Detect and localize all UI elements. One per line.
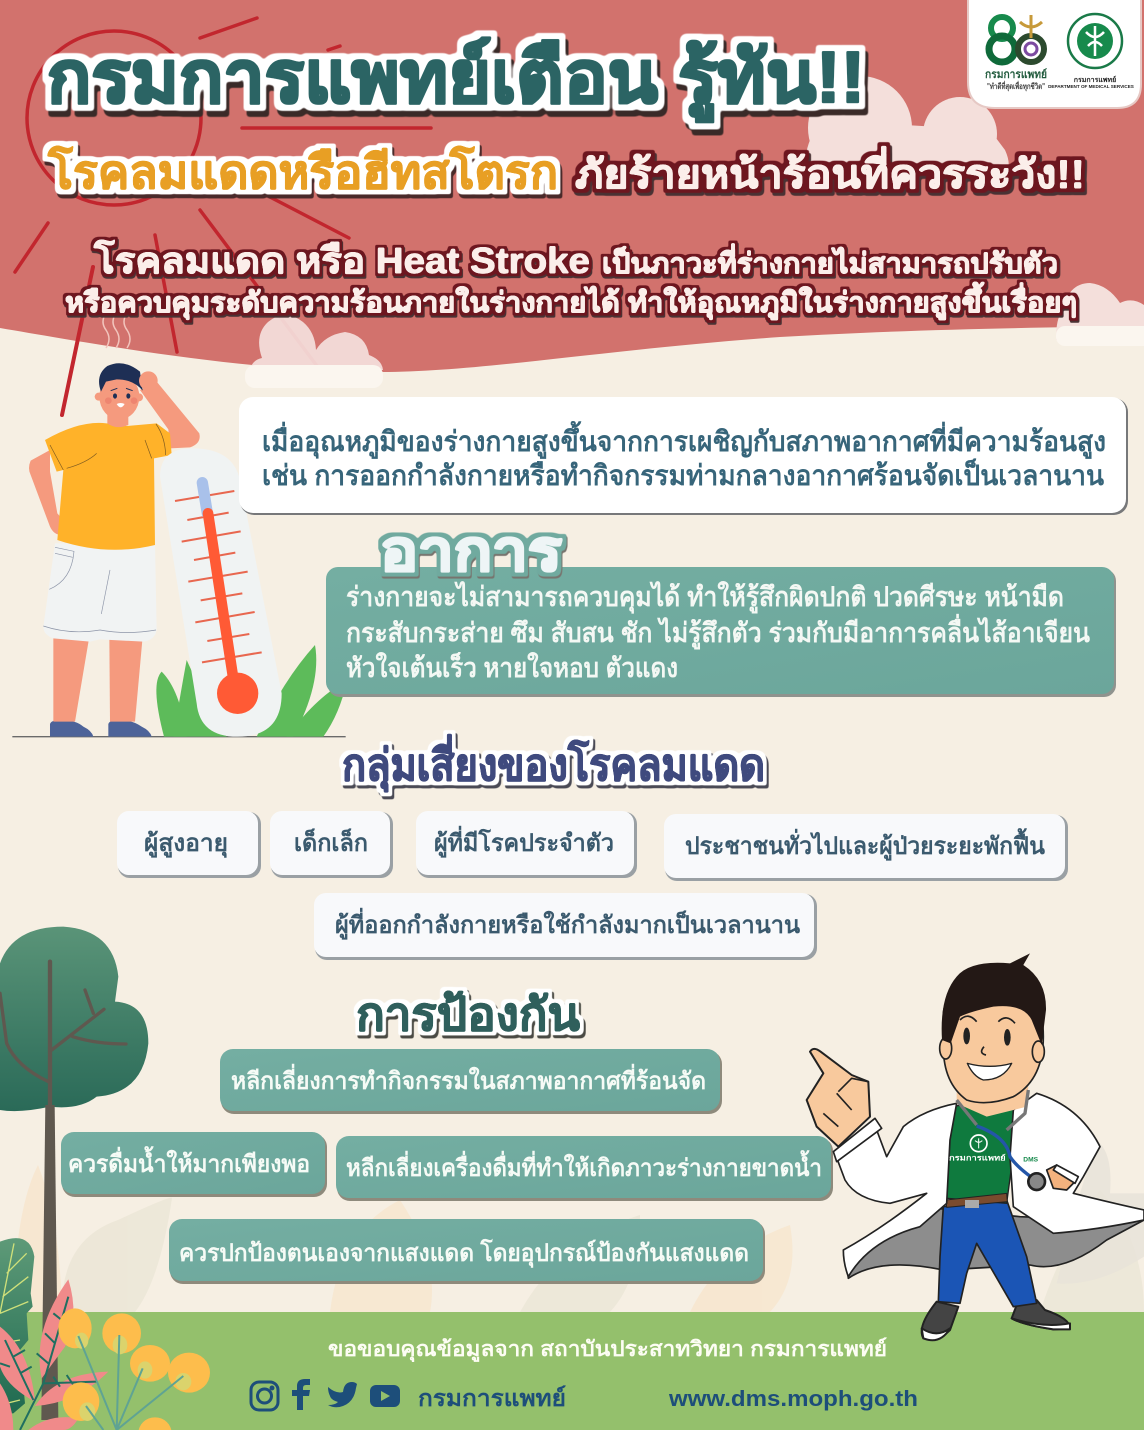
head (95, 363, 143, 419)
prevention heading: การป้องกัน (356, 988, 581, 1040)
soft shadow (1057, 1140, 1144, 1284)
pill: avoid outdoor activity: หลีกเลี่ยงการทำกิจกรรมในสภาพอากาศที่ร้อนจัด (231, 1063, 706, 1095)
risk group pills (117, 811, 1068, 960)
pill: drink water (61, 1132, 327, 1197)
symptoms panel: กระสับกระส่าย ซึม สับสน ชัก ไม่รู้สึกตัว ร่วมกับมีอาการคลื่นไส้อาเจียน (346, 613, 1090, 650)
stethoscope (957, 1090, 1045, 1190)
footer website: www.dms.moph.go.th (668, 1386, 918, 1411)
pill: children: เด็กเล็ก (294, 828, 368, 857)
pill: elderly (117, 811, 261, 878)
icon: 80 years logo (989, 15, 1044, 62)
shorts (43, 543, 157, 642)
shoes (50, 720, 152, 737)
intro paragraph: เป็นภาวะที่ร่างกายไม่สามารถปรับตัว (602, 243, 1058, 279)
icon: youtube (370, 1385, 400, 1407)
clouds (245, 76, 1144, 388)
footer credit: ขอขอบคุณข้อมูลจาก สถาบันประสาทวิทยา กรมการแพทย์ (328, 1337, 887, 1363)
illustration: man with thermometer (12, 363, 347, 737)
pill: avoid outdoor activity (220, 1049, 722, 1114)
pill: children (270, 811, 393, 878)
leaf veins (0, 1297, 97, 1430)
prevention pills (61, 1049, 833, 1284)
shirt (947, 1097, 1027, 1203)
pointing hand (807, 1049, 870, 1147)
pink leaves (0, 1279, 108, 1430)
coat underside (847, 1207, 1144, 1278)
head (943, 977, 1043, 1103)
orange flowers (58, 1308, 210, 1430)
pill: avoid dehydrating drinks: หลีกเลี่ยงเครื่องดื่มที่ทำให้เกิดภาวะร่างกายขาดน้ำ (346, 1149, 822, 1182)
pill: general public: ประชาชนทั่วไปและผู้ป่วยระยะพักฟื้น (685, 827, 1046, 861)
neck (107, 412, 128, 427)
white callout card (239, 397, 1128, 515)
red header wave (0, 0, 1144, 372)
shirt (45, 423, 172, 550)
pill: heavy exertion (314, 893, 817, 960)
flower stems (78, 1335, 183, 1430)
plant leaves (156, 645, 347, 737)
intro paragraph: หรือควบคุมระดับความร้อนภายในร่างกายได้ ทำให้อุณหภูมิในร่างกายสูงขึ้นเรื่อยๆ (65, 281, 1077, 320)
hair (942, 953, 1046, 1045)
coat badge: DMS (1023, 1156, 1039, 1163)
logo panel (968, 0, 1141, 108)
shirt logo (949, 1135, 1006, 1163)
left arm (29, 450, 68, 535)
logo caption right: กรมการแพทย์ (1074, 75, 1116, 84)
symptoms panel: ร่างกายจะไม่สามารถควบคุมได้ ทำให้รู้สึกผิดปกติ ปวดศีรษะ หน้ามืด (346, 581, 1064, 614)
symptoms panel (326, 567, 1116, 697)
pill: sun protection: ควรปกป้องตนเองจากแสงแดด โดยอุปกรณ์ป้องกันแสงแดด (179, 1238, 749, 1269)
coat right (1010, 1093, 1144, 1233)
thermometer bulb (217, 673, 258, 714)
ground line (12, 735, 346, 739)
shorts details (43, 547, 156, 632)
pill: sun protection (169, 1219, 765, 1284)
symptoms heading: อาการ (380, 519, 562, 582)
raised arm (140, 382, 200, 448)
foreground plants (0, 1238, 210, 1430)
logo caption right: DEPARTMENT OF MEDICAL SERVICES (1048, 84, 1134, 89)
shirt logo: กรมการแพทย์ (949, 1154, 1006, 1163)
trousers (938, 1200, 1037, 1307)
pill: chronic disease: ผู้ที่มีโรคประจำตัว (434, 825, 614, 858)
intro paragraph: โรคลมแดด หรือ Heat Stroke (93, 239, 590, 281)
pill: general public (664, 814, 1068, 881)
main title: กรมการแพทย์เตือน รู้ทัน!! (47, 37, 865, 123)
thermometer tube (202, 483, 207, 513)
right hand (1047, 1165, 1077, 1190)
pill: chronic disease (416, 811, 637, 878)
footer facebook name: กรมการแพทย์ (418, 1385, 566, 1411)
pill: drink water: ควรดื่มน้ำให้มากเพียงพอ (68, 1145, 310, 1178)
pill: elderly: ผู้สูงอายุ (144, 830, 228, 859)
logo caption left (985, 68, 1047, 92)
subtitle danger: ภัยร้ายหน้าร้อนที่ควรระวัง!! (575, 146, 1085, 197)
logo caption left: กรมการแพทย์ (985, 68, 1047, 81)
shirt creases (50, 424, 166, 470)
icon: instagram (251, 1382, 278, 1410)
thermometer body (160, 448, 282, 737)
fist (139, 371, 158, 390)
pill: avoid dehydrating drinks (336, 1136, 833, 1201)
icon: facebook (292, 1379, 310, 1410)
face (960, 1016, 1015, 1080)
icon: twitter (328, 1382, 357, 1407)
doctor mascot (807, 953, 1144, 1340)
heat waves (103, 313, 130, 348)
green leaf (0, 1238, 34, 1413)
intro paragraph (65, 239, 1077, 320)
pill: heavy exertion: ผู้ที่ออกกำลังกายหรือใช้กำลังมากเป็นเวลานาน (335, 907, 801, 940)
logo caption right (1048, 75, 1134, 89)
faded background leaves (15, 1165, 1144, 1312)
tree trunk (41, 1105, 58, 1420)
neck (957, 1083, 1028, 1117)
legs (53, 637, 143, 722)
symptoms panel: หัวใจเต้นเร็ว หายใจหอบ ตัวแดง (346, 650, 678, 683)
belt (946, 1193, 1007, 1207)
tree canopy (0, 927, 148, 1111)
coat cuffs (833, 1118, 882, 1162)
shoes (922, 1300, 1070, 1340)
coat left (835, 1103, 957, 1277)
logo caption left: "ทำดีที่สุดเพื่อทุกชีวิต" (987, 80, 1045, 92)
footer band (0, 1312, 1144, 1430)
tree branches (0, 962, 126, 1107)
risk groups heading: กลุ่มเสี่ยงของโรคลมแดด (342, 734, 765, 793)
sun outline and rays (15, 18, 431, 415)
white callout card: เมื่ออุณหภูมิของร่างกายสูงขึ้นจากการเผชิญกับสภาพอากาศที่มีความร้อนสูง (262, 420, 1106, 459)
white callout card: เช่น การออกกำลังกายหรือทำกิจกรรมท่ามกลางอากาศร้อนจัดเป็นเวลานาน (262, 458, 1104, 491)
icon: ministry emblem (1068, 14, 1122, 68)
thermometer ticks (175, 491, 262, 662)
subtitle orange: โรคลมแดดหรือฮีทสโตรก (47, 145, 558, 198)
tree (0, 927, 148, 1420)
